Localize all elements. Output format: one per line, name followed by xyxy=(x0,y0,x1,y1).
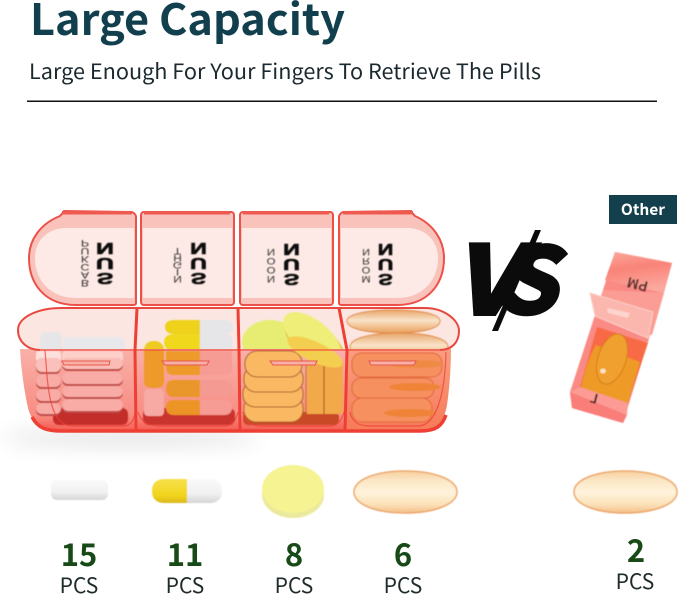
top lid label: PM xyxy=(625,272,650,297)
softgels xyxy=(347,310,448,360)
mirrored label: N xyxy=(362,246,370,256)
mirrored label: U xyxy=(378,255,393,272)
cavity with pills xyxy=(580,327,648,403)
count 6 xyxy=(384,530,422,595)
VS mark xyxy=(452,206,566,342)
latches xyxy=(62,361,416,365)
other tag xyxy=(609,195,677,224)
other tag: Other xyxy=(621,198,665,220)
count 11 xyxy=(166,530,204,595)
count 15: 15 xyxy=(61,530,97,575)
mirrored label: O xyxy=(267,255,275,265)
count 8: 8 xyxy=(285,530,303,575)
mirrored label: G xyxy=(173,259,182,270)
count 15 xyxy=(60,530,98,595)
round tablets xyxy=(242,303,354,379)
mirrored label: T xyxy=(174,245,182,256)
mirrored label: N xyxy=(96,239,114,257)
mirrored label: M xyxy=(361,273,371,283)
lid: morning xyxy=(339,211,444,305)
mirrored label: R xyxy=(362,255,370,265)
other pill box xyxy=(570,252,672,423)
mirrored label: U xyxy=(96,254,114,272)
white tablet xyxy=(51,480,108,500)
mirrored label: B xyxy=(81,277,89,288)
count 11: 11 xyxy=(167,530,203,575)
pills through front wall xyxy=(36,330,443,425)
yellow tablet xyxy=(262,465,324,518)
mirrored label: S xyxy=(284,270,299,288)
subtitle: Large Enough For Your Fingers To Retrieve The Pills xyxy=(29,56,541,86)
capsule stacks xyxy=(143,350,235,425)
round tablet stacks xyxy=(243,330,346,425)
mirrored label: N xyxy=(173,273,182,284)
mirrored label: S xyxy=(97,269,113,287)
tray dividers and rim xyxy=(18,308,459,431)
mirrored label xyxy=(81,237,114,288)
count 2 xyxy=(616,526,654,595)
mirrored label: N xyxy=(378,240,393,257)
mirrored label xyxy=(361,240,393,287)
mirrored label: N xyxy=(190,239,207,257)
mirrored label: H xyxy=(173,252,182,263)
softgel stacks xyxy=(352,353,443,422)
mirrored label: K xyxy=(81,253,90,264)
count 6: 6 xyxy=(394,530,412,575)
mirrored label: I xyxy=(176,266,179,277)
count 2: 2 xyxy=(627,526,645,571)
mirrored label: O xyxy=(362,264,370,274)
lid: backup xyxy=(29,211,136,305)
softgel xyxy=(354,471,457,513)
bottom label: L xyxy=(588,387,600,408)
mirrored label: U xyxy=(283,255,300,273)
tray rim interior xyxy=(18,308,459,350)
mirrored label: O xyxy=(267,264,275,274)
mirrored label: N xyxy=(267,273,275,283)
VS mark: V xyxy=(452,206,539,342)
mirrored label: A xyxy=(81,269,90,280)
VS mark: S xyxy=(498,209,566,339)
mirrored label: S xyxy=(191,269,206,287)
tray front wall xyxy=(20,349,346,432)
pill box shadow xyxy=(0,429,260,447)
tablet stacks xyxy=(36,351,128,425)
softgel other xyxy=(574,471,677,513)
mirrored label: N xyxy=(283,240,300,258)
mirrored label: U xyxy=(190,254,207,272)
capsule xyxy=(152,479,222,503)
lid: night xyxy=(141,211,234,305)
mirrored label: P xyxy=(81,237,89,248)
mirrored label xyxy=(267,240,300,288)
mirrored label: U xyxy=(81,245,90,256)
white tablets xyxy=(40,332,125,354)
mirrored label: N xyxy=(267,246,275,256)
mirrored label: C xyxy=(81,261,90,272)
mirrored label: S xyxy=(378,270,393,287)
count 8 xyxy=(275,530,313,595)
lid: noon xyxy=(240,211,333,305)
mirrored label xyxy=(173,239,207,287)
capsules xyxy=(144,320,233,361)
large pill box xyxy=(18,211,459,432)
open flap xyxy=(590,293,653,338)
